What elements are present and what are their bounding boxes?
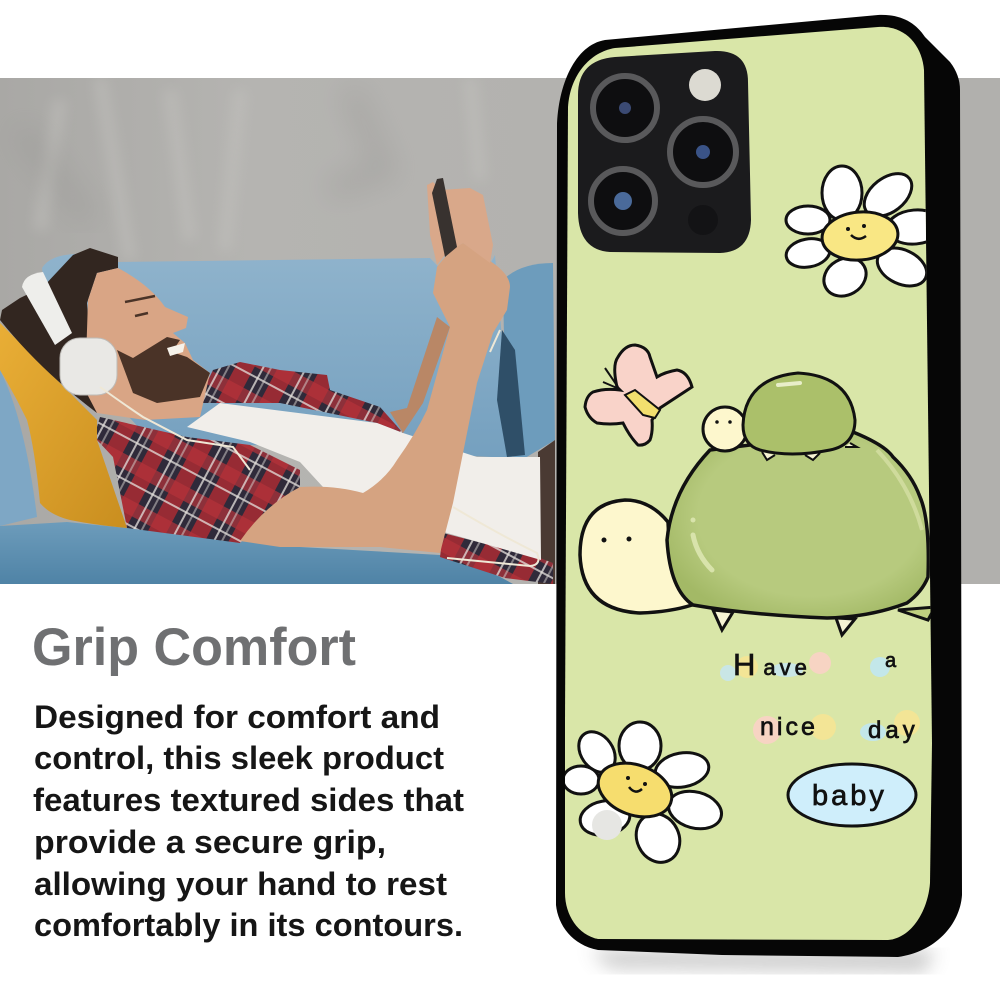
panel: lifestyle photo xyxy=(0,78,1000,584)
screen background xyxy=(565,27,932,940)
baby label xyxy=(788,764,916,826)
turtle: small xyxy=(703,373,857,460)
body text: provide a secure grip, xyxy=(34,824,386,860)
turtle: big head xyxy=(580,500,700,613)
body text: features textured sides that xyxy=(33,782,464,818)
man: face xyxy=(85,268,210,420)
body text: allowing your hand to rest xyxy=(34,866,447,902)
body text xyxy=(33,699,464,943)
handwritten message: nice xyxy=(760,713,818,741)
body text: Designed for comfort and xyxy=(34,699,440,735)
body text: control, this sleek product xyxy=(34,740,444,776)
turtle: big legs and tail xyxy=(713,607,935,635)
heading: Grip Comfort xyxy=(32,618,356,677)
headphones xyxy=(22,272,538,566)
camera module xyxy=(578,51,751,253)
man: jeans and belt xyxy=(538,440,555,584)
man: hair xyxy=(0,248,118,413)
handwritten message: a xyxy=(885,650,897,672)
phone shadow xyxy=(590,950,935,972)
flower top right xyxy=(784,164,926,298)
pillow xyxy=(0,323,127,528)
man: plaid shirt xyxy=(97,362,553,584)
flower bottom left xyxy=(563,722,726,870)
body text: comfortably in its contours. xyxy=(34,907,463,943)
baby label: baby xyxy=(812,780,887,812)
handwritten message: H ave xyxy=(733,647,811,682)
butterfly xyxy=(585,345,692,445)
panel: phone case xyxy=(556,15,962,972)
screen artwork xyxy=(563,165,944,870)
handwritten message xyxy=(720,647,920,744)
man: arms and hands holding phone xyxy=(240,178,510,553)
man: white t-shirt xyxy=(187,403,541,560)
case body xyxy=(556,15,962,957)
handwritten message: day xyxy=(868,717,919,744)
sofa xyxy=(0,254,555,584)
turtle: big shell xyxy=(667,432,928,618)
